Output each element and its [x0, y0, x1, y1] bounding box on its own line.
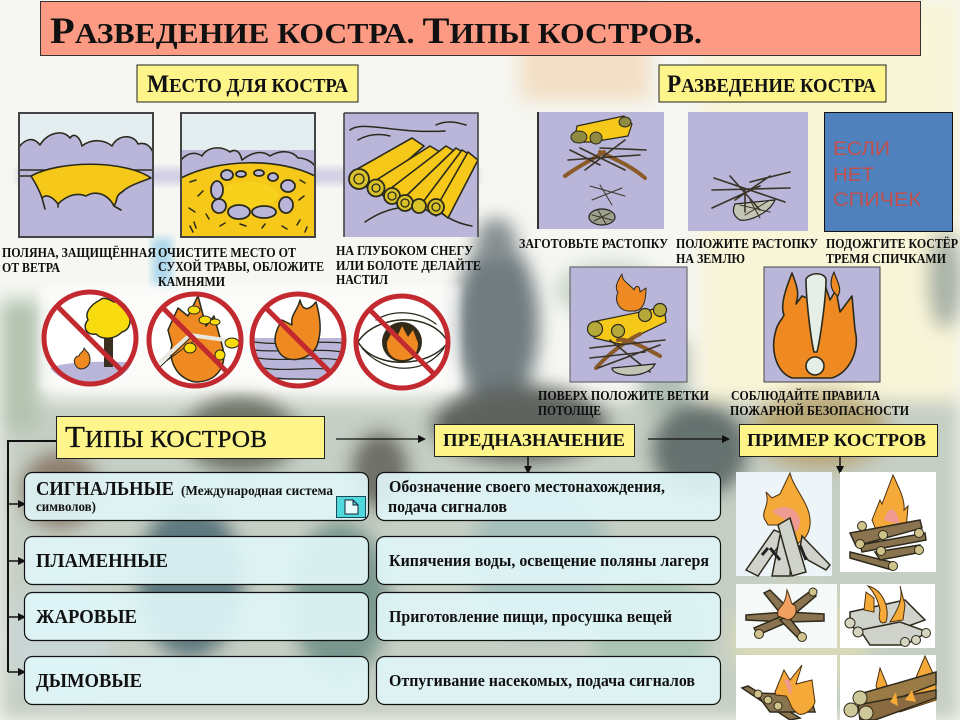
illustration: log crib fire: [840, 472, 936, 572]
caption: deep snow: [336, 243, 481, 287]
row: smoke type: [24, 656, 368, 704]
caption: clear the place: СУХОЙ ТРАВЫ, ОБЛОЖИТЕ: [158, 259, 324, 274]
arrow: types to purpose: [336, 438, 424, 440]
row: flame purpose: Кипячения воды, освещение поляны лагеря: [389, 551, 709, 570]
icon: no fire left unattended: [355, 295, 449, 389]
caption: glade: [2, 245, 156, 275]
panel: if there are no matches: ЕСЛИ: [833, 139, 890, 160]
caption: fire safety: СОБЛЮДАЙТЕ ПРАВИЛА: [731, 388, 880, 403]
title banner: [40, 2, 920, 56]
icon: no fire on branches: [148, 293, 242, 387]
caption: thicker branches: ПОВЕРХ ПОЛОЖИТЕ ВЕТКИ: [538, 388, 709, 403]
heading: место для костра: [137, 65, 358, 102]
caption: deep snow: НАСТИЛ: [336, 272, 388, 287]
heading: fire examples: [740, 424, 938, 456]
icon: place kindling on ground: [688, 112, 808, 231]
row: embers purpose: Приготовление пищи, просушка вещей: [389, 607, 672, 626]
row: signal type: СИГНАЛЬНЫЕ: [36, 478, 174, 500]
caption: fire safety: [730, 388, 909, 418]
icon: document button: [336, 496, 366, 518]
illustration: lean-to fire: [736, 655, 837, 720]
heading: purpose: ПРЕДНАЗНАЧЕНИЕ: [443, 430, 625, 450]
row: smoke purpose: [376, 656, 720, 704]
caption: clear the place: [158, 245, 324, 289]
row: smoke type: ДЫМОВЫЕ: [36, 670, 142, 692]
illustration: long-log fire: [840, 655, 936, 720]
arrow: examples down: [839, 456, 841, 472]
row: embers purpose: [376, 592, 720, 640]
heading: fire types: ТИПЫ КОСТРОВ: [65, 419, 267, 454]
row: signal type: (Международная система: [181, 484, 333, 499]
row: signal type: [24, 472, 368, 520]
icon: cleared place with stones: [181, 113, 315, 237]
connector: types bracket with arrows: [8, 441, 56, 672]
arrow: purpose to examples: [648, 438, 728, 440]
caption: light the fire: ТРЕМЯ СПИЧКАМИ: [826, 251, 946, 266]
heading: разведение костра: РАЗВЕДЕНИЕ КОСТРА: [667, 71, 877, 98]
icon: lay thicker branches on top: [570, 267, 687, 382]
heading: purpose: [434, 424, 634, 456]
caption: fire safety: ПОЖАРНОЙ БЕЗОПАСНОСТИ: [730, 403, 909, 418]
row: flame purpose: [376, 536, 720, 584]
caption: thicker branches: [538, 388, 709, 418]
icon: log platform on deep snow: [344, 113, 478, 237]
illustration: birch teepee fire: [736, 472, 832, 576]
caption: glade: ПОЛЯНА, ЗАЩИЩЁННАЯ: [2, 245, 156, 260]
row: smoke purpose: Отпугивание насекомых, подача сигналов: [389, 671, 695, 690]
icon: fire safety exclamation: [764, 267, 880, 382]
icon: no fire near water: [251, 293, 345, 387]
icon: no fire under trees: [43, 291, 137, 385]
heading: разведение костра: [659, 65, 886, 102]
caption: deep snow: НА ГЛУБОКОМ СНЕГУ: [336, 243, 473, 258]
caption: clear the place: КАМНЯМИ: [158, 274, 225, 289]
icon: prepare kindling: [537, 112, 664, 229]
row: flame type: [24, 536, 368, 584]
caption: deep snow: ИЛИ БОЛОТЕ ДЕЛАЙТЕ: [336, 258, 481, 273]
caption: place kindling: НА ЗЕМЛЮ: [676, 251, 745, 266]
row: embers type: [24, 592, 368, 640]
row: signal purpose: [376, 472, 720, 520]
illustration: parallel logs fire: [840, 584, 935, 648]
title banner: РАЗВЕДЕНИЕ КОСТРА. ТИПЫ КОСТРОВ.: [50, 11, 702, 52]
heading: fire types: [56, 416, 324, 458]
row: flame type: ПЛАМЕННЫЕ: [36, 550, 168, 572]
row: signal purpose: подача сигналов: [388, 497, 507, 516]
heading: fire examples: ПРИМЕР КОСТРОВ: [747, 430, 926, 450]
caption: glade: ОТ ВЕТРА: [2, 260, 60, 275]
row: signal purpose: Обозначение своего местонахождения,: [389, 477, 665, 496]
row: embers type: ЖАРОВЫЕ: [36, 606, 137, 628]
caption: prepare kindling: ЗАГОТОВЬТЕ РАСТОПКУ: [519, 236, 668, 251]
illustration: star fire: [736, 584, 837, 648]
icon: glade protected from wind: [19, 113, 153, 237]
panel: if there are no matches: СПИЧЕК: [833, 190, 921, 211]
panel: if there are no matches: [824, 112, 952, 232]
panel: if there are no matches: НЕТ: [833, 165, 874, 186]
row: signal type: символов): [36, 500, 96, 515]
caption: thicker branches: ПОТОЛЩЕ: [538, 403, 601, 418]
caption: place kindling: ПОЛОЖИТЕ РАСТОПКУ: [676, 236, 818, 251]
caption: clear the place: ОЧИСТИТЕ МЕСТО ОТ: [158, 245, 296, 260]
arrow: purpose down: [527, 456, 529, 472]
caption: place kindling: [676, 236, 818, 266]
heading: место для костра: МЕСТО ДЛЯ КОСТРА: [147, 71, 349, 98]
caption: light the fire: [826, 236, 958, 266]
